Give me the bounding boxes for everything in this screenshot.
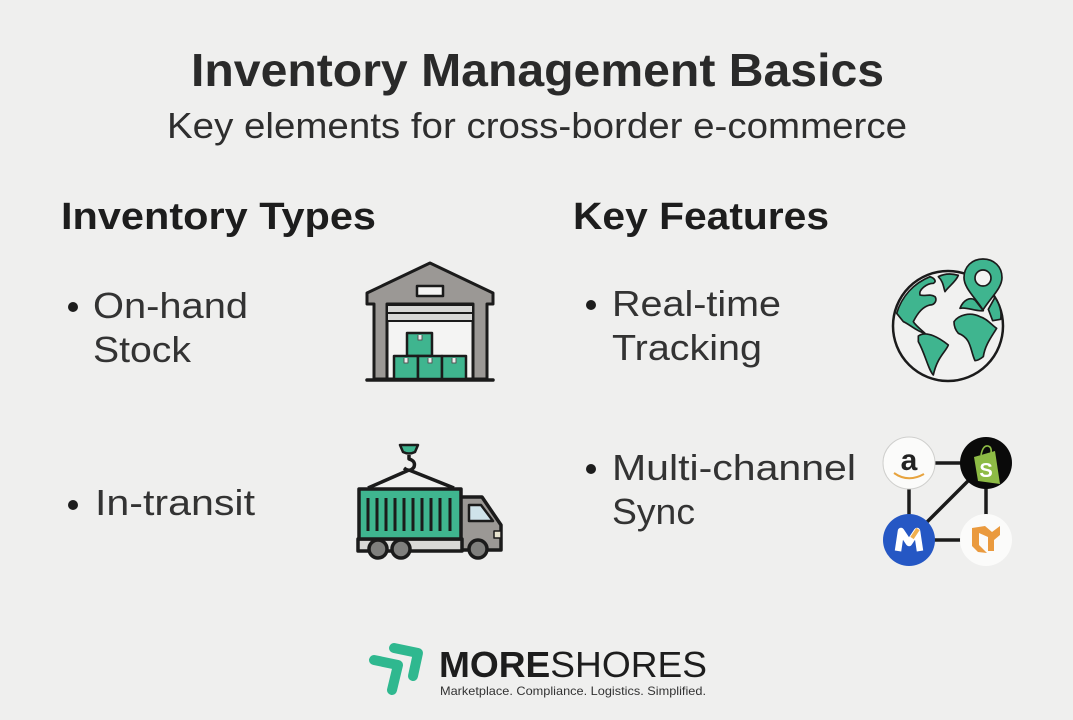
logo: moreshores (374, 644, 707, 698)
list item: real-time tracking: Real-time (612, 283, 781, 324)
list item: on-hand stock: On-hand (93, 285, 248, 326)
icon: container truck (358, 445, 501, 558)
logo mark (374, 648, 418, 690)
list item: real-time tracking: Tracking (612, 327, 762, 368)
subtitle: Key elements for cross-border e-commerce (167, 105, 907, 146)
icon: warehouse (367, 263, 493, 380)
list item: multi-channel sync: Sync (612, 491, 695, 532)
icon: globe with pin (893, 259, 1003, 381)
node: blue M (883, 514, 935, 566)
tagline: Marketplace. Compliance. Logistics. Simplified. (440, 684, 706, 698)
panel: key features (573, 196, 1012, 566)
list item: multi-channel sync: Multi-channel (612, 447, 856, 488)
list item: real-time tracking (586, 283, 781, 368)
heading: key features: Key Features (573, 196, 829, 238)
heading: inventory types: Inventory Types (61, 196, 376, 238)
node: amazon: a (901, 444, 918, 477)
panel: inventory types (61, 196, 501, 558)
list item: in-transit: In-transit (95, 482, 255, 523)
node: shopify: S (979, 460, 993, 482)
list item: on-hand stock: Stock (93, 329, 192, 370)
list item: multi-channel sync (586, 447, 856, 532)
title: Inventory Management Basics (191, 44, 884, 96)
node: orange M (960, 514, 1012, 566)
wordmark: MORESHORES (439, 644, 707, 685)
list item: on-hand stock (68, 285, 248, 370)
icon: marketplace network (883, 437, 1012, 566)
